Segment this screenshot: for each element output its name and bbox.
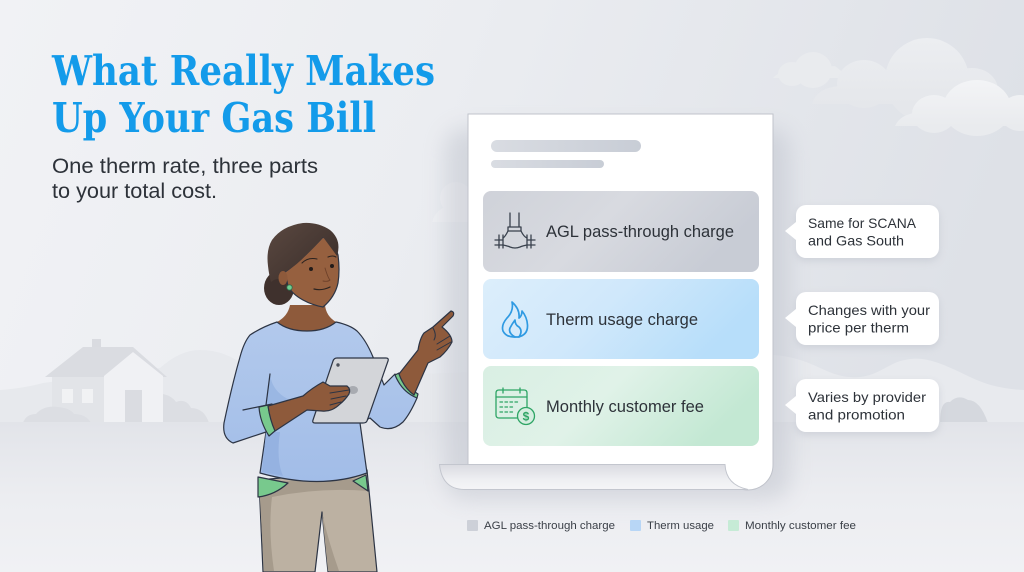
callout: changes with your price per therm: Changes with your [808,302,930,318]
house [23,339,209,423]
neck [277,305,336,331]
clouds top right [773,38,1024,136]
icon: pipe valve [495,213,535,248]
title: What Really Makes [51,47,435,95]
row: monthly customer fee [483,366,759,446]
ear [278,271,288,285]
hair bun [264,271,294,305]
document shadow [445,128,790,500]
shirt hem [258,475,368,497]
subtitle [52,155,318,203]
header placeholder bars [491,140,641,168]
label: Therm usage charge [546,311,698,329]
tablet [313,358,388,423]
callout: varies by provider and promotion: Varies by provider [808,389,926,405]
callout: changes with your price per therm: price per therm [808,320,909,336]
icon: calendar with dollar coin: $ [523,410,530,424]
earring [287,285,292,290]
pointing arm and hand [399,311,454,395]
subtitle: to your total cost. [52,180,217,203]
callout: same for SCANA and Gas South: and Gas South [808,232,904,248]
tablet hand and forearm [268,382,350,431]
legend: Therm usage [647,520,714,532]
callout: changes with your price per therm [785,292,939,348]
legend [467,520,856,532]
paper curl [440,464,748,490]
right cuff [395,373,418,398]
legend: AGL pass-through charge [484,520,615,532]
title: Up Your Gas Bill [52,94,376,142]
icon: flame [502,302,528,337]
row: AGL pass-through charge [483,191,759,272]
callout: varies by provider and promotion: and promotion [808,406,905,422]
hills [0,350,470,423]
illustration: woman holding tablet and pointing [224,223,454,572]
face [285,237,339,307]
title [51,47,435,142]
left cuff [259,405,276,436]
row: therm usage charge [483,279,759,359]
label: AGL pass-through charge [546,223,734,241]
hair [268,223,338,287]
shirt [224,322,417,482]
callout: varies by provider and promotion [785,379,939,435]
legend: Monthly customer fee [745,520,856,532]
label: Monthly customer fee [546,398,704,416]
bushes right [940,397,988,423]
eyes, brows, nose, mouth [302,256,336,290]
pants [259,470,377,572]
document [440,114,773,490]
icon: calendar with dollar coin [496,388,534,424]
callout: same for SCANA and Gas South [785,205,939,261]
callout: same for SCANA and Gas South: Same for SCANA [808,215,917,231]
ground [0,422,1024,572]
cloud behind document [432,182,472,222]
subtitle: One therm rate, three parts [52,155,318,178]
